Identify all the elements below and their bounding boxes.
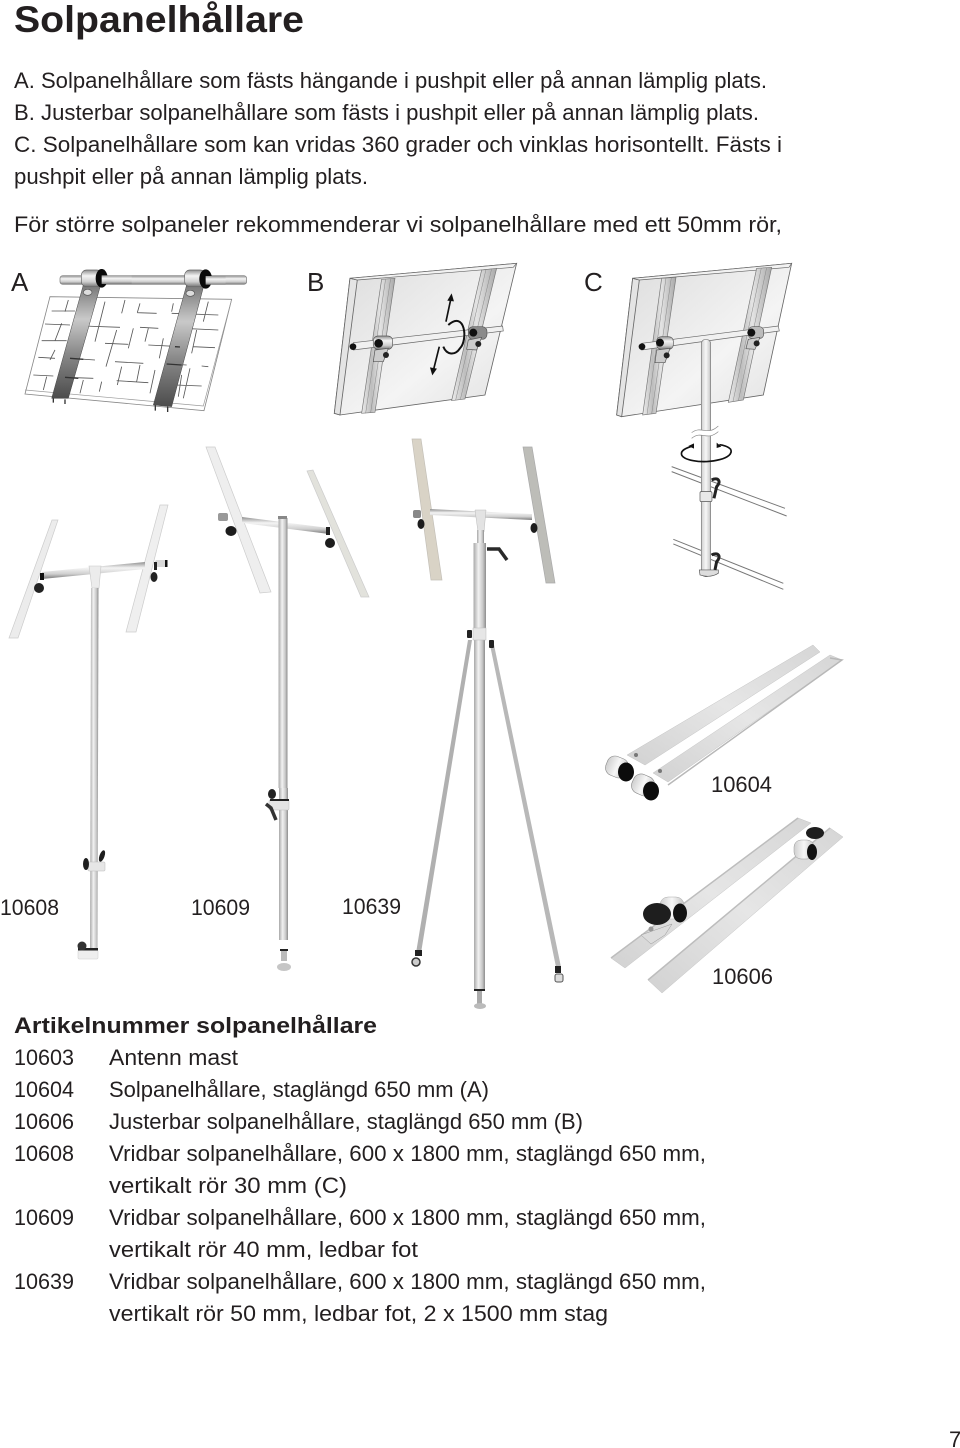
article number list: vertikalt rör 30 mm (C) — [109, 1173, 347, 1198]
upper pole clamp — [700, 492, 712, 502]
legs — [416, 640, 472, 953]
lower pole clamp — [699, 570, 718, 576]
diagram C: rotating holder on pole — [617, 263, 792, 589]
article number list: 10606 — [14, 1109, 74, 1134]
clamp with lever — [269, 800, 289, 810]
handle — [487, 549, 507, 560]
article number list: 10639 — [14, 1269, 74, 1294]
base clamp — [78, 950, 98, 959]
left clamp — [81, 270, 102, 287]
rail — [728, 267, 772, 402]
crossbar — [42, 562, 145, 579]
product photo: tripod 10639 — [412, 439, 563, 1009]
foot — [280, 949, 288, 951]
label B: B — [307, 267, 324, 297]
intro text block: För större solpaneler rekommenderar vi solpanelhållare med ett 50mm rör, — [14, 212, 782, 237]
article number list: vertikalt rör 40 mm, ledbar fot — [109, 1237, 419, 1262]
title: Solpanelhållare — [14, 0, 304, 40]
intro text block — [14, 68, 782, 237]
article number list: 10603 — [14, 1045, 74, 1070]
left bar — [9, 520, 58, 638]
lower clamp — [641, 924, 672, 944]
pole — [90, 588, 98, 952]
mid clamp — [88, 862, 105, 871]
product number labels: 10639 — [342, 894, 401, 919]
article number list: Justerbar solpanelhållare, staglängd 650 mm (B) — [109, 1109, 583, 1134]
article number list: Solpanelhållare, staglängd 650 mm (A) — [109, 1077, 489, 1102]
feet — [412, 958, 420, 966]
intro text block: A. Solpanelhållare som fästs hängande i pushpit eller på annan lämplig plats. — [14, 68, 767, 93]
article number list: Antenn mast — [109, 1045, 239, 1070]
clamps — [657, 337, 673, 349]
railing — [672, 467, 787, 589]
product number labels: 10609 — [191, 895, 250, 920]
mast — [474, 543, 486, 633]
upper clamp — [794, 840, 814, 859]
product number labels: 10604 — [711, 772, 772, 797]
product number labels — [0, 772, 773, 989]
diagram B: adjustable holder — [334, 263, 517, 415]
intro text block: pushpit eller på annan lämplig plats. — [14, 164, 368, 189]
rod — [353, 326, 503, 350]
right strap — [153, 285, 204, 407]
intro text block: C. Solpanelhållare som kan vridas 360 grader och vinklas horisontellt. Fästs i — [14, 132, 782, 157]
article number list: Vridbar solpanelhållare, 600 x 1800 mm, staglängd 650 mm, — [109, 1269, 706, 1294]
article number list: 10609 — [14, 1205, 74, 1230]
list heading: Artikelnummer solpanelhållare — [14, 1013, 377, 1038]
product photo: 10606 adjustable bracket pair — [611, 818, 843, 993]
label C: C — [584, 267, 603, 297]
article number list: 10608 — [14, 1141, 74, 1166]
product photo: stand 10608 — [9, 505, 168, 959]
article number list: Vridbar solpanelhållare, 600 x 1800 mm, staglängd 650 mm, — [109, 1205, 706, 1230]
rod — [642, 326, 779, 350]
article number list: 10604 — [14, 1077, 74, 1102]
pole — [278, 518, 288, 788]
collar — [473, 628, 486, 640]
article number list — [14, 1013, 706, 1326]
label A: A — [11, 267, 29, 297]
article number list: Vridbar solpanelhållare, 600 x 1800 mm, staglängd 650 mm, — [109, 1141, 706, 1166]
rail — [362, 278, 395, 413]
product number labels: 10608 — [0, 895, 59, 920]
article number list: vertikalt rör 50 mm, ledbar fot, 2 x 1500 mm stag — [109, 1301, 608, 1326]
hub — [89, 566, 101, 588]
clamps — [373, 336, 393, 349]
intro text block: B. Justerbar solpanelhållare som fästs i pushpit eller på annan lämplig plats. — [14, 100, 759, 125]
product photo: 10604 bracket pair — [603, 645, 842, 800]
right clamp — [185, 270, 205, 287]
rail — [452, 268, 497, 401]
hub and inner tube — [475, 510, 486, 532]
product photo: stand 10609 — [206, 447, 369, 971]
rail — [643, 277, 676, 415]
right bar — [126, 505, 168, 632]
left strap — [52, 285, 101, 398]
horizontal rod — [60, 276, 247, 284]
arrows — [433, 298, 451, 371]
diagram A: hanging holder on panel — [25, 269, 247, 412]
rotation arrow — [681, 445, 731, 462]
product number labels: 10606 — [712, 964, 773, 989]
pole — [701, 339, 711, 577]
